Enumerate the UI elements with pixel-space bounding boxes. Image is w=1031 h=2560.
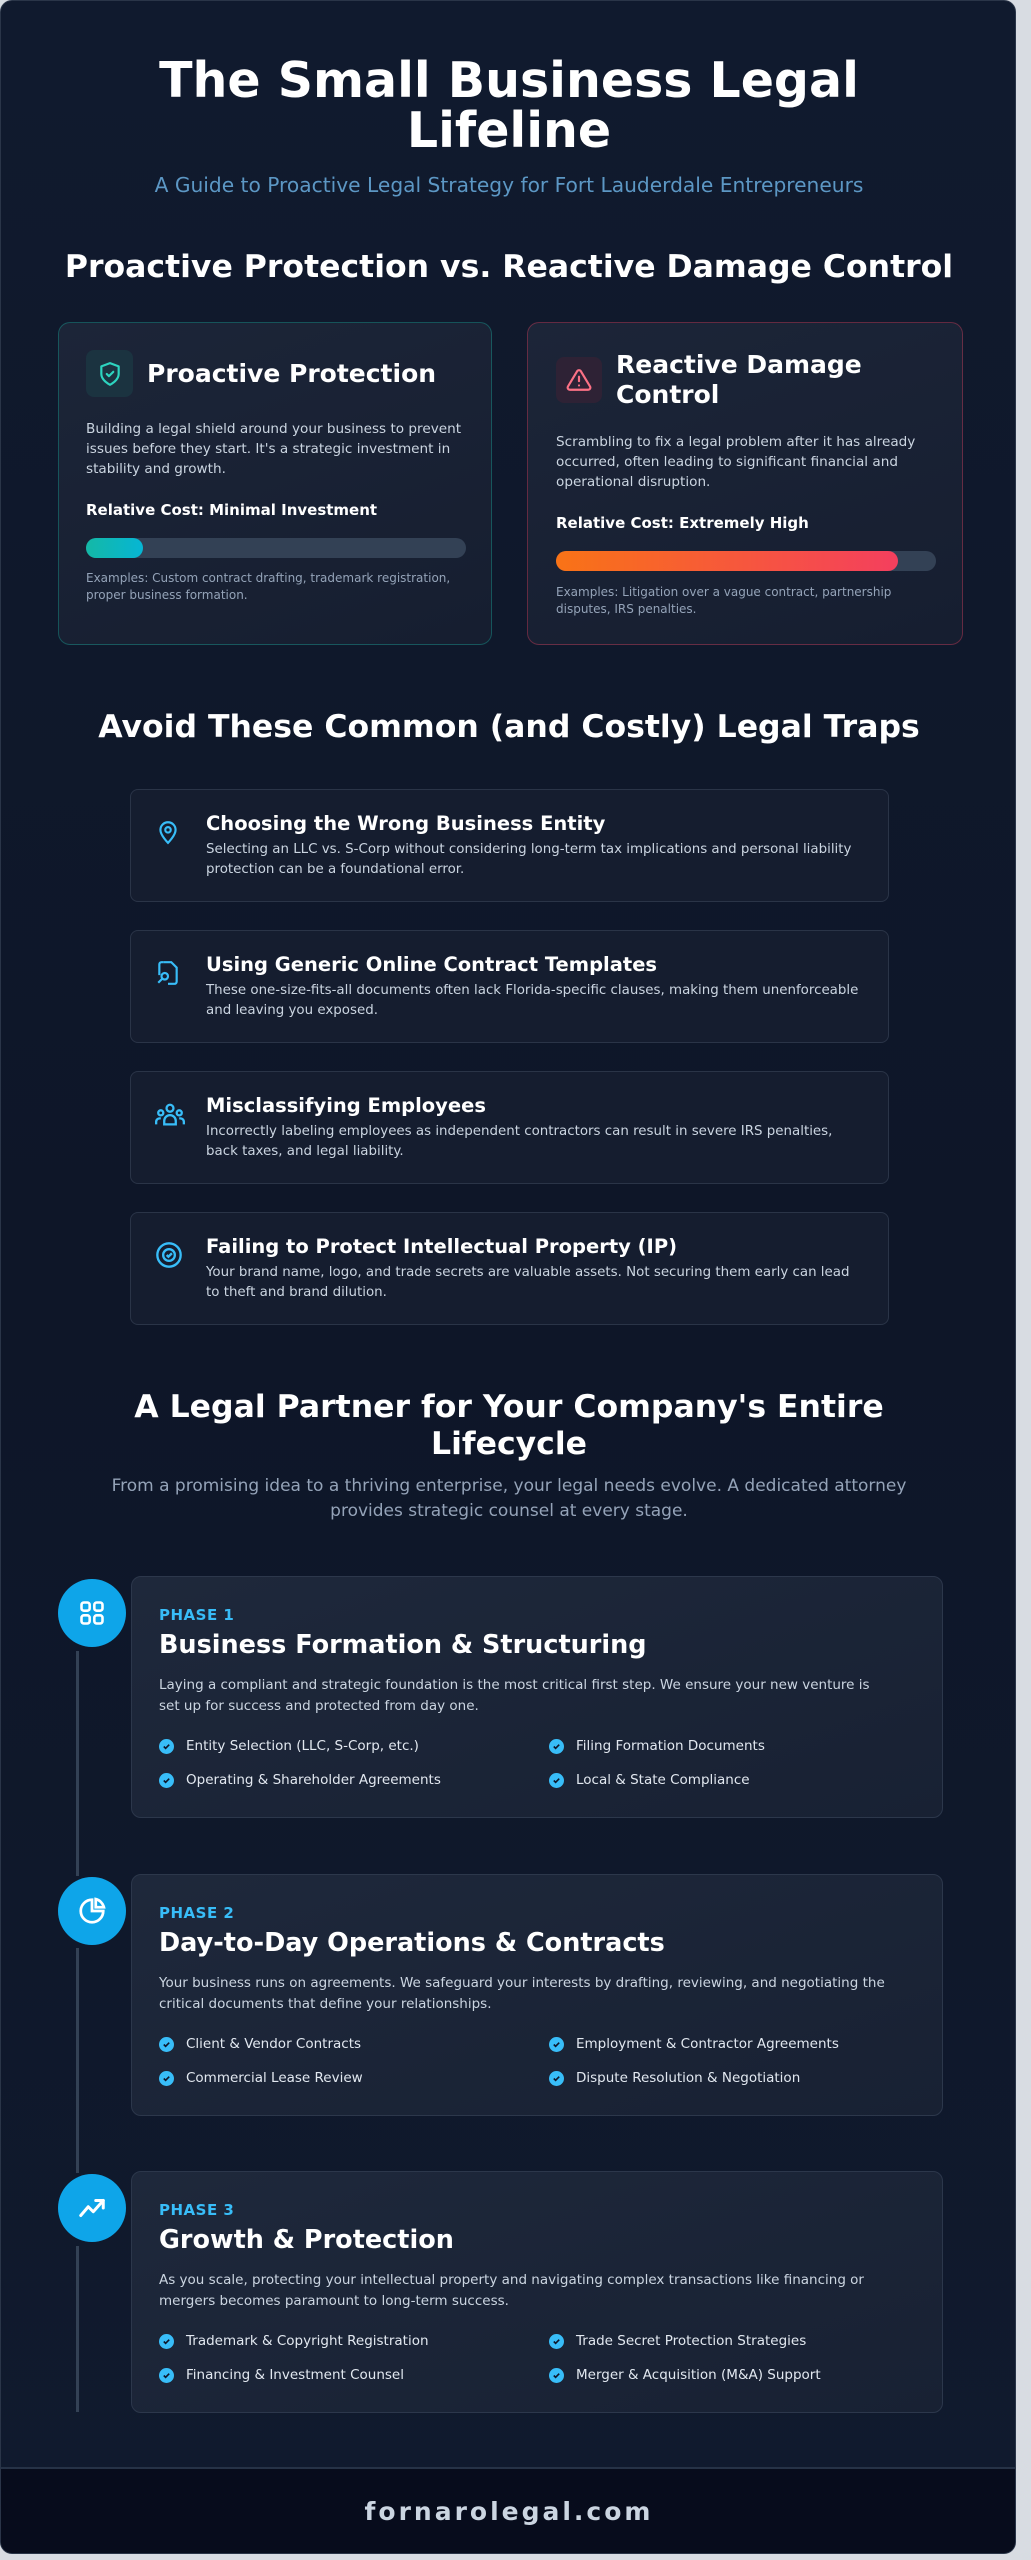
trap: business entity: Choosing the Wrong Business Entity [206,812,605,835]
panel: proactive protection [58,322,492,645]
panel: phase 3: Merger & Acquisition (M&A) Support [576,2367,821,2383]
panel: phase 3: Trademark & Copyright Registration [186,2333,429,2349]
label: cost minimal: Relative Cost: Minimal Investment [86,501,377,519]
footer text: fornarolegal.com [365,2496,653,2526]
panel: phase 1: Filing Formation Documents [576,1738,765,1754]
panel: phase 2: PHASE 2 [159,1904,234,1922]
label: cost high: Relative Cost: Extremely High [556,514,809,532]
text: lifecycle intro: From a promising idea to a thriving enterprise, your legal needs evolve. A dedicated attorney provides strategic counsel at every stage. [112,1476,906,1521]
text: reactive examples: Examples: Litigation over a vague contract, partnership disputes, IRS penalties. [556,585,891,616]
trap: business entity [130,789,889,902]
panel: phase 3: Growth & Protection [159,2225,454,2255]
icon: phase 3 trend [58,2174,126,2242]
icon: document search [158,961,178,985]
panel: phase 1: Entity Selection (LLC, S-Corp, etc.) [186,1738,419,1754]
subtitle: A Guide to Proactive Legal Strategy for Fort Lauderdale Entrepreneurs [155,173,863,197]
text: proactive examples: Examples: Custom contract drafting, trademark registration, proper business formation. [86,571,450,602]
text: proactive description: Building a legal shield around your business to prevent issues before they start. It's a strategic investment in stability and growth. [86,421,461,477]
panel: phase 3: Trade Secret Protection Strategies [576,2333,806,2349]
icon: phase 1 grid [58,1579,126,1647]
heading: comparison: Proactive Protection vs. Reactive Damage Control [65,249,953,285]
panel: phase 1: Business Formation & Structuring [159,1630,647,1660]
panel: phase 3: As you scale, protecting your intellectual property and navigating complex transactions like financing or mergers becomes paramount to long-term success. [159,2272,864,2309]
title: The Small Business Legal [159,52,859,109]
panel: phase 1: Laying a compliant and strategic foundation is the most critical first step. We ensure your new venture is set up for success and protected from day one. [159,1677,870,1714]
icon: people [155,1104,185,1126]
icon: location pin [159,821,177,844]
trap: misclassifying: Misclassifying Employees [206,1094,486,1117]
panel: phase 3: PHASE 3 [159,2201,234,2219]
bar: high cost [556,551,936,571]
panel: phase 3: Financing & Investment Counsel [186,2367,404,2383]
icon: phase 2 pie [58,1877,126,1945]
icon: warning [556,357,602,403]
heading: lifecycle: A Legal Partner for Your Company's Entire Lifecycle [134,1389,884,1462]
trap: generic templates [130,930,889,1043]
panel: phase 2: Your business runs on agreements. We safeguard your interests by drafting, reviewing, and negotiating the critical documents that define your relationships. [159,1975,885,2012]
trap: intellectual property: Failing to Protect Intellectual Property (IP) [206,1235,677,1258]
trap: generic templates: Using Generic Online Contract Templates [206,953,657,976]
panel: phase 1: PHASE 1 [159,1606,234,1624]
trap: misclassifying [130,1071,889,1184]
title: Lifeline [407,102,611,159]
panel: phase 1: Local & State Compliance [576,1772,750,1788]
panel: phase 2: Client & Vendor Contracts [186,2036,361,2052]
bar: minimal cost [86,538,466,558]
panel: phase 1: Operating & Shareholder Agreements [186,1772,441,1788]
trap: business entity: Selecting an LLC vs. S-Corp without considering long-term tax implications and personal liability protection can be a foundational error. [206,842,851,877]
panel: phase 3 [131,2171,943,2413]
panel: phase 1 [131,1576,943,1818]
text: reactive description: Scrambling to fix a legal problem after it has already occurred, often leading to significant financial and operational disruption. [556,434,915,490]
icon: badge [156,1242,182,1268]
heading: proactive: Proactive Protection [147,359,436,388]
panel: phase 2: Employment & Contractor Agreements [576,2036,839,2052]
panel: phase 2: Commercial Lease Review [186,2070,363,2086]
panel: reactive damage control [527,322,963,645]
title [159,52,859,159]
panel: phase 2 [131,1874,943,2116]
trap: generic templates: These one-size-fits-all documents often lack Florida-specific clauses, making them unenforceable and leaving you exposed. [206,983,858,1018]
footer [1,2467,1017,2557]
heading: legal traps: Avoid These Common (and Costly) Legal Traps [98,709,920,745]
trap: intellectual property [130,1212,889,1325]
panel: phase 2: Dispute Resolution & Negotiation [576,2070,800,2086]
trap: misclassifying: Incorrectly labeling employees as independent contractors can result in severe IRS penalties, back taxes, and legal liability. [206,1124,832,1159]
heading: reactive: Reactive Damage Control [616,350,862,409]
trap: intellectual property: Your brand name, logo, and trade secrets are valuable assets. Not securing them early can lead to theft and brand dilution. [206,1265,849,1300]
panel: phase 2: Day-to-Day Operations & Contracts [159,1928,665,1958]
icon: shield [86,350,133,397]
